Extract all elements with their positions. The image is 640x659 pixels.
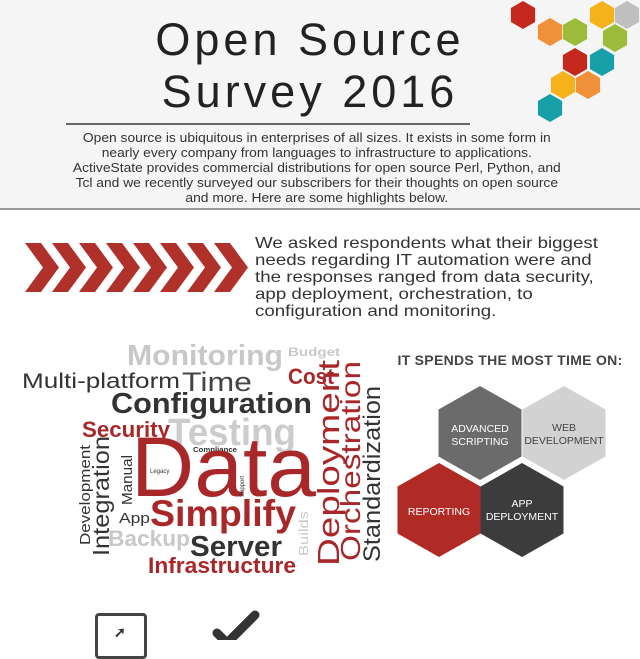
intro paragraph: ActiveState provides commercial distributions for open source Perl, Python, and [73,160,561,175]
title underline [66,123,470,125]
title: Survey 2016 [162,66,458,117]
word cloud: Security [82,417,171,442]
title [155,14,465,117]
word cloud: Standardization [359,386,386,562]
automation text: We asked respondents what their biggest [255,235,598,252]
word cloud: Time [182,367,252,397]
intro paragraph: nearly every company from languages to infrastructure to applications. [102,145,532,160]
word cloud: App [119,510,150,527]
word cloud: Infrastructure [148,553,296,578]
automation text: the responses ranged from data security, [255,269,594,286]
hex chart: APP [511,498,533,510]
header divider [0,208,640,210]
hex chart: SCRIPTING [451,436,509,448]
word cloud: Data [131,420,316,514]
hex chart: ADVANCED [451,423,509,435]
intro paragraph: Tcl and we recently surveyed our subscribers for their thoughts on open source [76,175,558,190]
intro paragraph [73,130,561,205]
logo hexagons [510,1,640,122]
icon: external link box [95,613,147,659]
word cloud: Builds [296,510,311,556]
word cloud: Monitoring [127,340,283,372]
word cloud: Development [77,444,94,545]
word cloud: Testing [168,412,296,454]
word cloud: Cost [288,364,335,389]
icon: external link box: ➚ [114,624,126,640]
intro paragraph: Open source is ubiquitous in enterprises of all sizes. It exists in some form in [83,130,551,145]
word cloud: Deployment [311,360,346,566]
word cloud: Multi-platform [22,370,180,393]
word cloud: Integration [88,436,114,556]
automation text: configuration and monitoring. [255,303,496,320]
intro paragraph: and more. Here are some highlights below. [185,190,448,205]
title: Open Source [155,14,465,65]
icon: checkmark [212,610,260,640]
word cloud: Server [190,531,282,563]
chevron arrows [25,243,248,292]
word cloud: Support [240,476,246,497]
automation text: app deployment, orchestration, to [255,286,533,303]
word cloud: Simplify [150,493,296,534]
word cloud: Orchestration [335,361,366,561]
hex chart: WEB [552,422,576,434]
hex chart heading: IT SPENDS THE MOST TIME ON: [397,352,623,368]
word cloud: Backup [108,526,190,551]
hex chart [398,386,606,557]
word cloud: Configuration [111,388,312,420]
hex chart: DEPLOYMENT [486,511,559,523]
word cloud: Manual [119,455,136,505]
hex chart: REPORTING [408,506,470,518]
automation text [255,235,598,320]
automation text: needs regarding IT automation were and [255,252,592,269]
word cloud: Compliance [193,447,237,454]
header background [0,0,640,209]
word cloud: Legacy [150,469,169,475]
word cloud [22,340,386,578]
word cloud: Budget [288,345,340,359]
hex chart: DEVELOPMENT [524,435,604,447]
